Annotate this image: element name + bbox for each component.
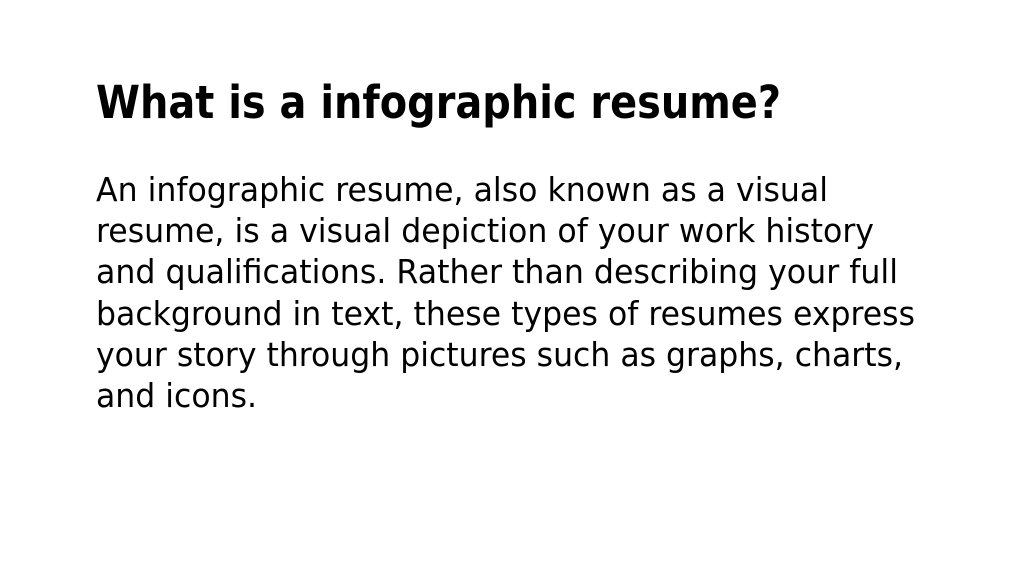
text block: definition paragraph: and qualifications. Rather than describing your full	[96, 252, 898, 291]
text block: definition paragraph: your story through pictures such as graphs, charts,	[96, 335, 903, 374]
text block: definition paragraph	[96, 170, 915, 415]
text block: definition paragraph: resume, is a visual depiction of your work history	[96, 211, 874, 250]
text block: definition paragraph: An infographic resume, also known as a visual	[96, 170, 828, 209]
title: What is a infographic resume?	[96, 76, 781, 129]
text block: definition paragraph: background in text, these types of resumes express	[96, 294, 915, 333]
text block: definition paragraph: and icons.	[96, 376, 257, 415]
